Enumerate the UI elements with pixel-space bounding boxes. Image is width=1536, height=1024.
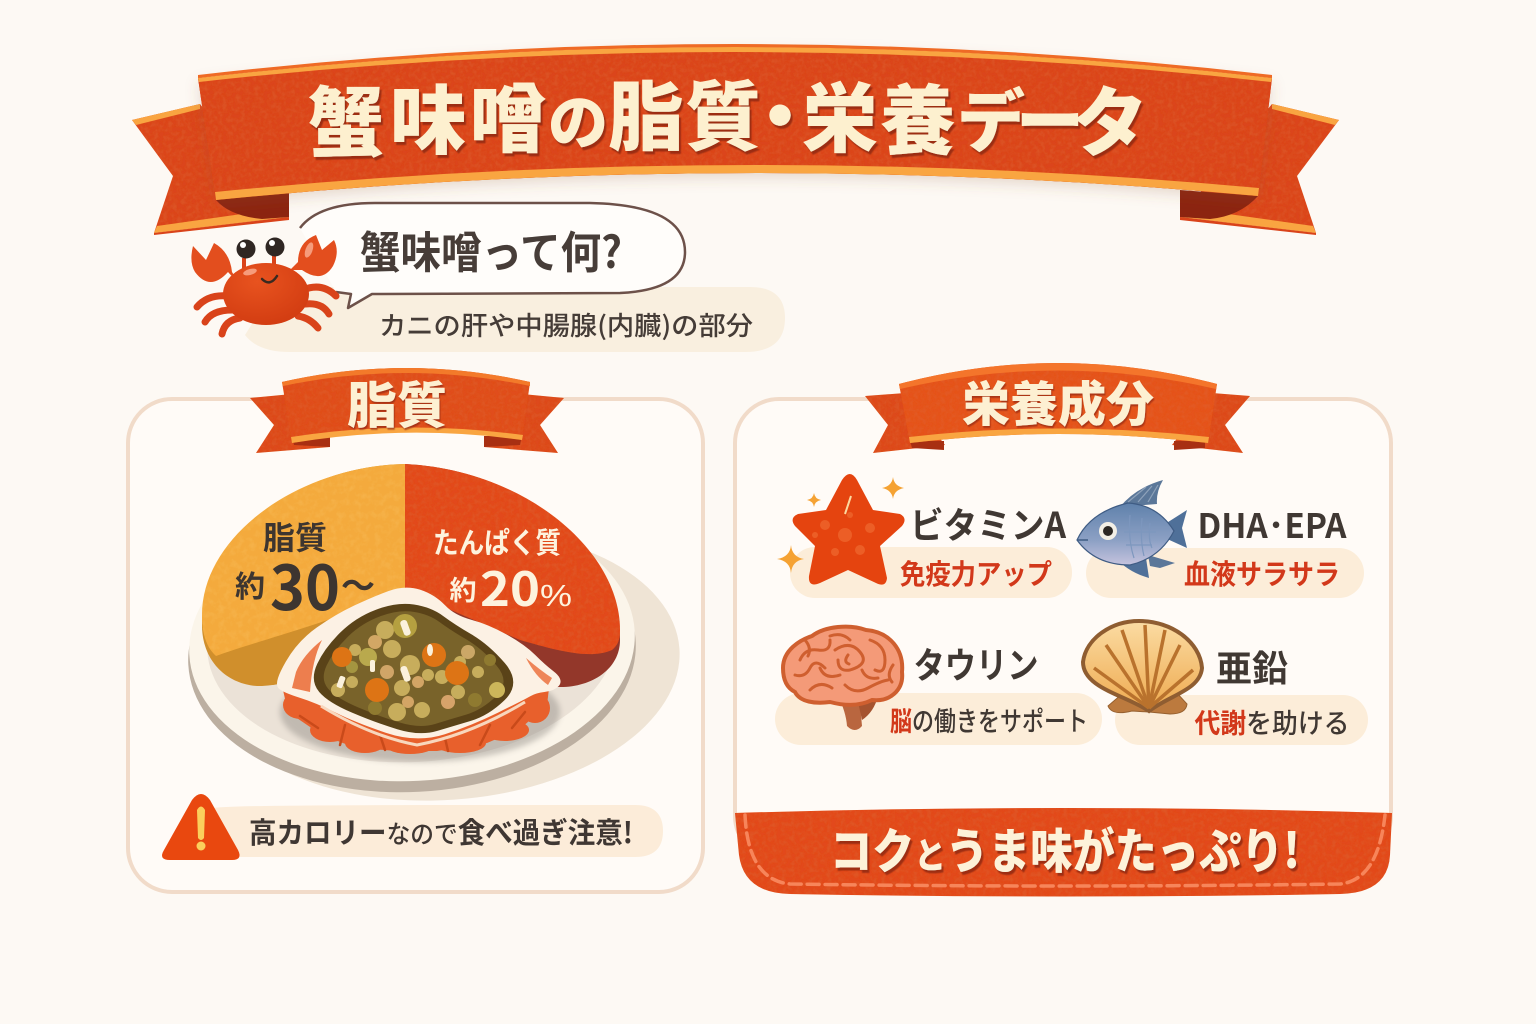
- ribbon heading: nutrients: [865, 363, 1250, 453]
- eyes: [236, 240, 256, 258]
- pie chart: fat and protein: [202, 464, 620, 687]
- nutrient: taurine: タウリン: [914, 637, 1038, 689]
- panel: nutrients: [735, 363, 1392, 896]
- shell lower lumps: [283, 640, 550, 754]
- bottom banner: コクとうま味がたっぷり!: [830, 812, 1300, 882]
- miso granules: [331, 614, 505, 721]
- title ribbon: の: [548, 75, 608, 162]
- warning note: [162, 794, 663, 860]
- pie segment: protein: たんぱく質: [433, 520, 561, 562]
- cream rim: [280, 591, 558, 735]
- legs: [197, 287, 336, 334]
- icon: brain: [783, 627, 902, 730]
- icon: warning triangle: [162, 794, 240, 860]
- pie segment: fat: [202, 464, 405, 686]
- icon: shell: [1083, 621, 1202, 714]
- title ribbon: デー: [957, 67, 1084, 166]
- subtitle pill: カニの肝や中腸腺(内臓)の部分: [379, 306, 753, 343]
- crab shell with kani miso: [280, 591, 560, 762]
- nutrient: DHA EPA: 血液サラサラ: [1184, 553, 1340, 593]
- ribbon heading: fat: 脂質: [347, 366, 447, 438]
- right tail: [1180, 104, 1339, 235]
- pie segment: protein: 20: [480, 551, 540, 620]
- pie segment: fat: 脂質: [263, 513, 327, 559]
- title ribbon: 蟹味噌: [308, 58, 546, 172]
- nutrient: vitamin A: ビタミンA: [910, 497, 1067, 549]
- title ribbon: [132, 44, 1339, 235]
- title ribbon: ・: [742, 56, 818, 166]
- icon: crab: [191, 235, 337, 334]
- speech bubble: 蟹味噌って何?: [360, 217, 622, 281]
- nutrient: taurine: 脳の働きをサポート: [890, 700, 1088, 739]
- nutrient: zinc: [1083, 621, 1368, 745]
- pie segment: protein: %: [540, 578, 572, 613]
- warning note: 高カロリーなので食べ過ぎ注意!: [249, 810, 633, 852]
- nutrient: taurine: [775, 627, 1102, 745]
- subtitle pill: [245, 287, 785, 352]
- pie segment: fat: 〜: [341, 559, 375, 608]
- nutrient: DHA EPA: DHA･EPA: [1198, 499, 1347, 548]
- miso filling: [317, 607, 510, 730]
- plate with shadow: [181, 494, 689, 816]
- main band: [198, 47, 1272, 200]
- pie segment: protein: 約: [450, 569, 476, 608]
- icon: star: [777, 474, 905, 585]
- title ribbon: 脂質: [608, 56, 761, 166]
- title ribbon: 栄養: [802, 58, 956, 170]
- ribbon heading: nutrients: 栄養成分: [962, 365, 1154, 435]
- left tail: [132, 104, 289, 235]
- pie segment: protein: [405, 464, 620, 687]
- speech bubble: [300, 203, 685, 308]
- nutrient: DHA EPA: [1077, 480, 1364, 598]
- pie segment: fat: 30: [270, 538, 340, 628]
- claws: [191, 243, 240, 285]
- ribbon heading: fat: [250, 366, 564, 453]
- panel: fat: [128, 366, 703, 892]
- pie segment: fat: 約: [235, 562, 265, 606]
- nutrient: vitamin A: [777, 474, 1072, 598]
- nutrient: zinc: 亜鉛: [1216, 640, 1288, 692]
- title ribbon: タ: [1072, 62, 1148, 172]
- body: [223, 263, 309, 325]
- nutrient: vitamin A: 免疫力アップ: [900, 553, 1052, 593]
- icon: fish: [1077, 480, 1187, 578]
- nutrient: zinc: 代謝を助ける: [1194, 702, 1350, 741]
- bottom banner: [735, 808, 1392, 896]
